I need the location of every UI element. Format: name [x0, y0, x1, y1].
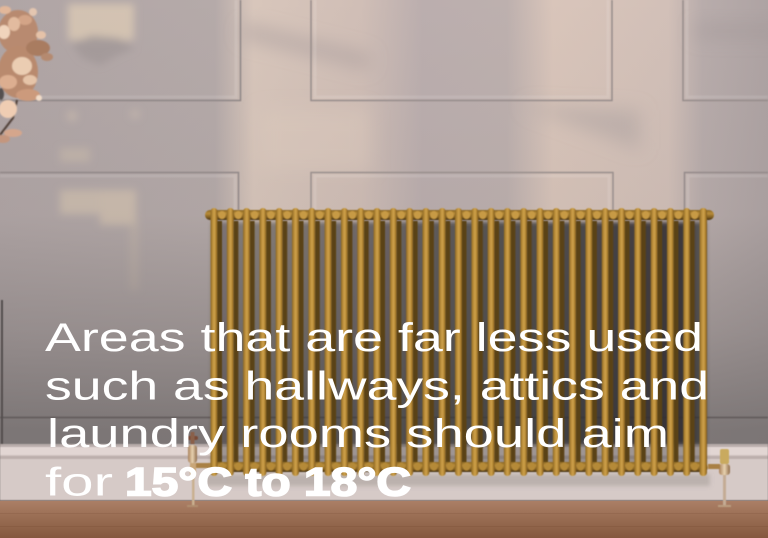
headline text — [45, 316, 709, 504]
left radiator valve — [187, 432, 210, 507]
wooden floor — [0, 501, 768, 538]
line 1: Areas that are far less used — [45, 316, 703, 360]
bottom header pipe — [208, 462, 708, 472]
line 4 lead-in: for — [45, 460, 113, 504]
radiator columns — [210, 208, 707, 476]
top header pipe — [205, 210, 714, 220]
line 4 temperature range: 15°C to 18°C — [125, 460, 411, 504]
right radiator valve — [708, 449, 731, 507]
radiator shadow — [205, 222, 710, 486]
line 2: such as hallways, attics and — [45, 364, 709, 408]
icon: dried flower branch — [0, 6, 53, 143]
line 3: laundry rooms should aim — [47, 412, 669, 456]
radiator — [205, 208, 714, 476]
skirting board — [0, 444, 768, 502]
